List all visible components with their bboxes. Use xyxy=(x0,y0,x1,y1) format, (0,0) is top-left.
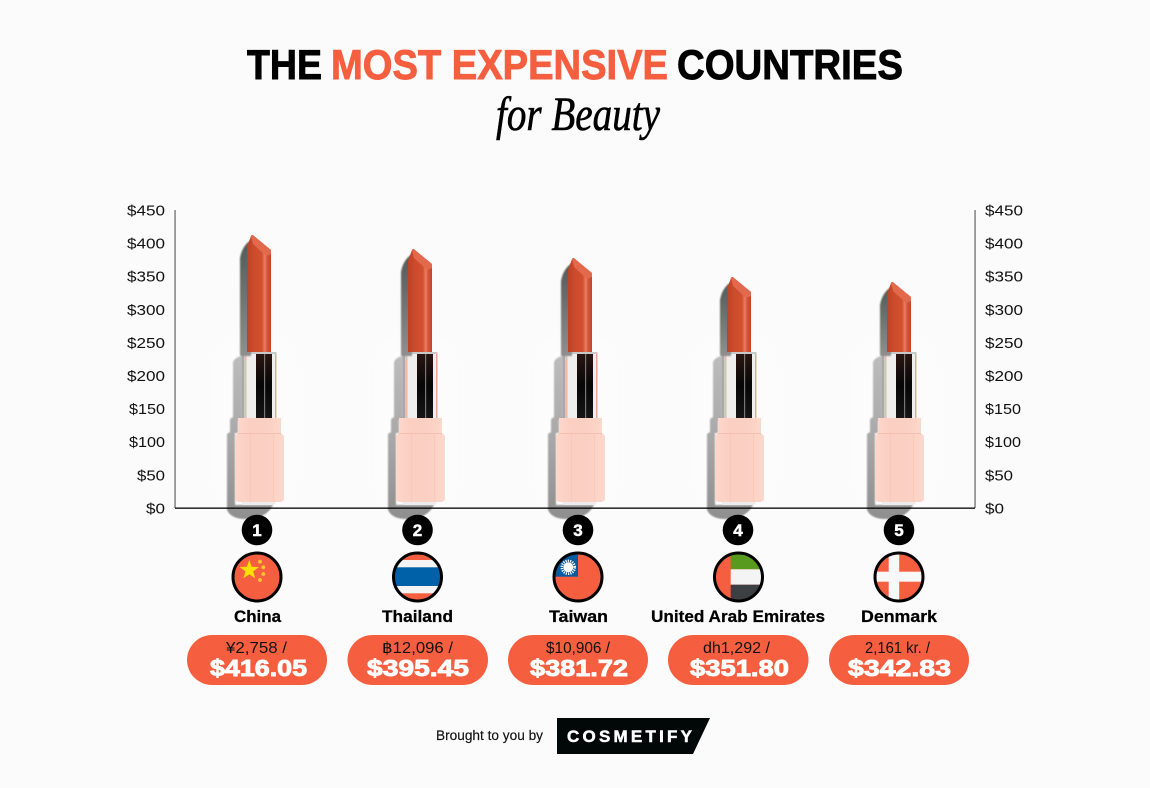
price pill: $416.05 xyxy=(210,655,307,681)
left axis labels: $300 xyxy=(127,302,165,319)
rank badge 5 xyxy=(884,515,914,545)
left axis labels xyxy=(127,202,165,517)
country name: Thailand xyxy=(382,608,453,626)
lipstick bar: Taiwan xyxy=(543,258,609,519)
country: Taiwan xyxy=(508,515,648,685)
subtitle: for Beauty xyxy=(496,88,661,141)
country: Denmark xyxy=(829,515,969,685)
price pill: $395.45 xyxy=(367,655,469,681)
title: THE xyxy=(247,41,322,88)
logo: Cosmetify xyxy=(557,718,710,754)
left axis labels: $200 xyxy=(127,368,165,385)
title: MOST EXPENSIVE xyxy=(331,41,668,88)
price pill: 2,161 kr. / xyxy=(865,640,931,657)
price pill xyxy=(348,635,488,685)
title xyxy=(247,41,903,88)
right axis labels: $300 xyxy=(985,302,1023,319)
icon: UAE flag xyxy=(713,552,764,603)
left axis labels: $400 xyxy=(127,236,165,253)
right axis labels: $400 xyxy=(985,236,1023,253)
right axis labels xyxy=(985,202,1023,517)
right axis labels: $0 xyxy=(985,500,1004,517)
left axis labels: $50 xyxy=(137,467,165,484)
rank badge 2 xyxy=(402,515,433,545)
country name: China xyxy=(234,608,282,626)
left axis labels: $0 xyxy=(146,500,165,517)
country name: United Arab Emirates xyxy=(651,608,825,626)
rank badge 1: 1 xyxy=(252,521,262,540)
right axis labels: $350 xyxy=(985,269,1023,286)
country name: Denmark xyxy=(861,608,938,626)
rank badge 1 xyxy=(242,515,272,545)
country: China xyxy=(187,515,327,685)
price pill xyxy=(668,635,808,685)
axis lines xyxy=(174,210,976,509)
title: COUNTRIES xyxy=(677,41,903,88)
rank badge 3 xyxy=(563,515,593,545)
left axis labels: $100 xyxy=(129,434,165,451)
right axis labels: $100 xyxy=(985,434,1021,451)
price pill: $10,906 / xyxy=(546,640,611,657)
icon: Thailand flag xyxy=(392,552,442,602)
right axis labels: $150 xyxy=(985,401,1021,418)
price pill: ฿12,096 / xyxy=(382,640,454,657)
left axis labels: $250 xyxy=(127,335,165,352)
country: United Arab Emirates xyxy=(651,515,825,685)
left axis labels: $450 xyxy=(127,202,165,220)
lipstick bar: Denmark xyxy=(862,282,928,519)
right axis labels: $450 xyxy=(985,202,1023,220)
right axis labels: $200 xyxy=(985,368,1023,385)
rank badge 2: 2 xyxy=(413,521,422,540)
right axis labels: $50 xyxy=(985,467,1013,484)
country name: Taiwan xyxy=(549,608,608,626)
price pill xyxy=(829,635,969,685)
price pill: ¥2,758 / xyxy=(225,640,288,657)
rank badge 5: 5 xyxy=(894,521,904,540)
rank badge 3: 3 xyxy=(573,521,583,540)
price pill: dh1,292 / xyxy=(703,640,771,657)
icon: China flag xyxy=(232,552,282,602)
right axis labels: $250 xyxy=(985,335,1023,352)
left axis labels: $350 xyxy=(127,269,165,286)
icon: Denmark flag xyxy=(874,552,924,602)
icon: Taiwan flag xyxy=(553,552,603,602)
lipstick bar: United Arab Emirates xyxy=(702,277,768,519)
rank badge 4: 4 xyxy=(733,521,743,540)
chart xyxy=(127,202,1023,519)
price pill xyxy=(508,635,648,685)
logo: Cosmetify: COSMETIFY xyxy=(567,727,693,746)
lipstick bar: China xyxy=(222,235,288,519)
price pill: $381.72 xyxy=(530,655,628,681)
price pill: $351.80 xyxy=(690,655,789,681)
country: Thailand xyxy=(348,515,488,685)
price pill xyxy=(187,635,327,685)
lipstick bar: Thailand xyxy=(383,249,449,519)
credit text: Brought to you by xyxy=(436,728,543,743)
left axis labels: $150 xyxy=(129,401,165,418)
price pill: $342.83 xyxy=(848,655,951,681)
rank badge 4 xyxy=(723,515,753,545)
